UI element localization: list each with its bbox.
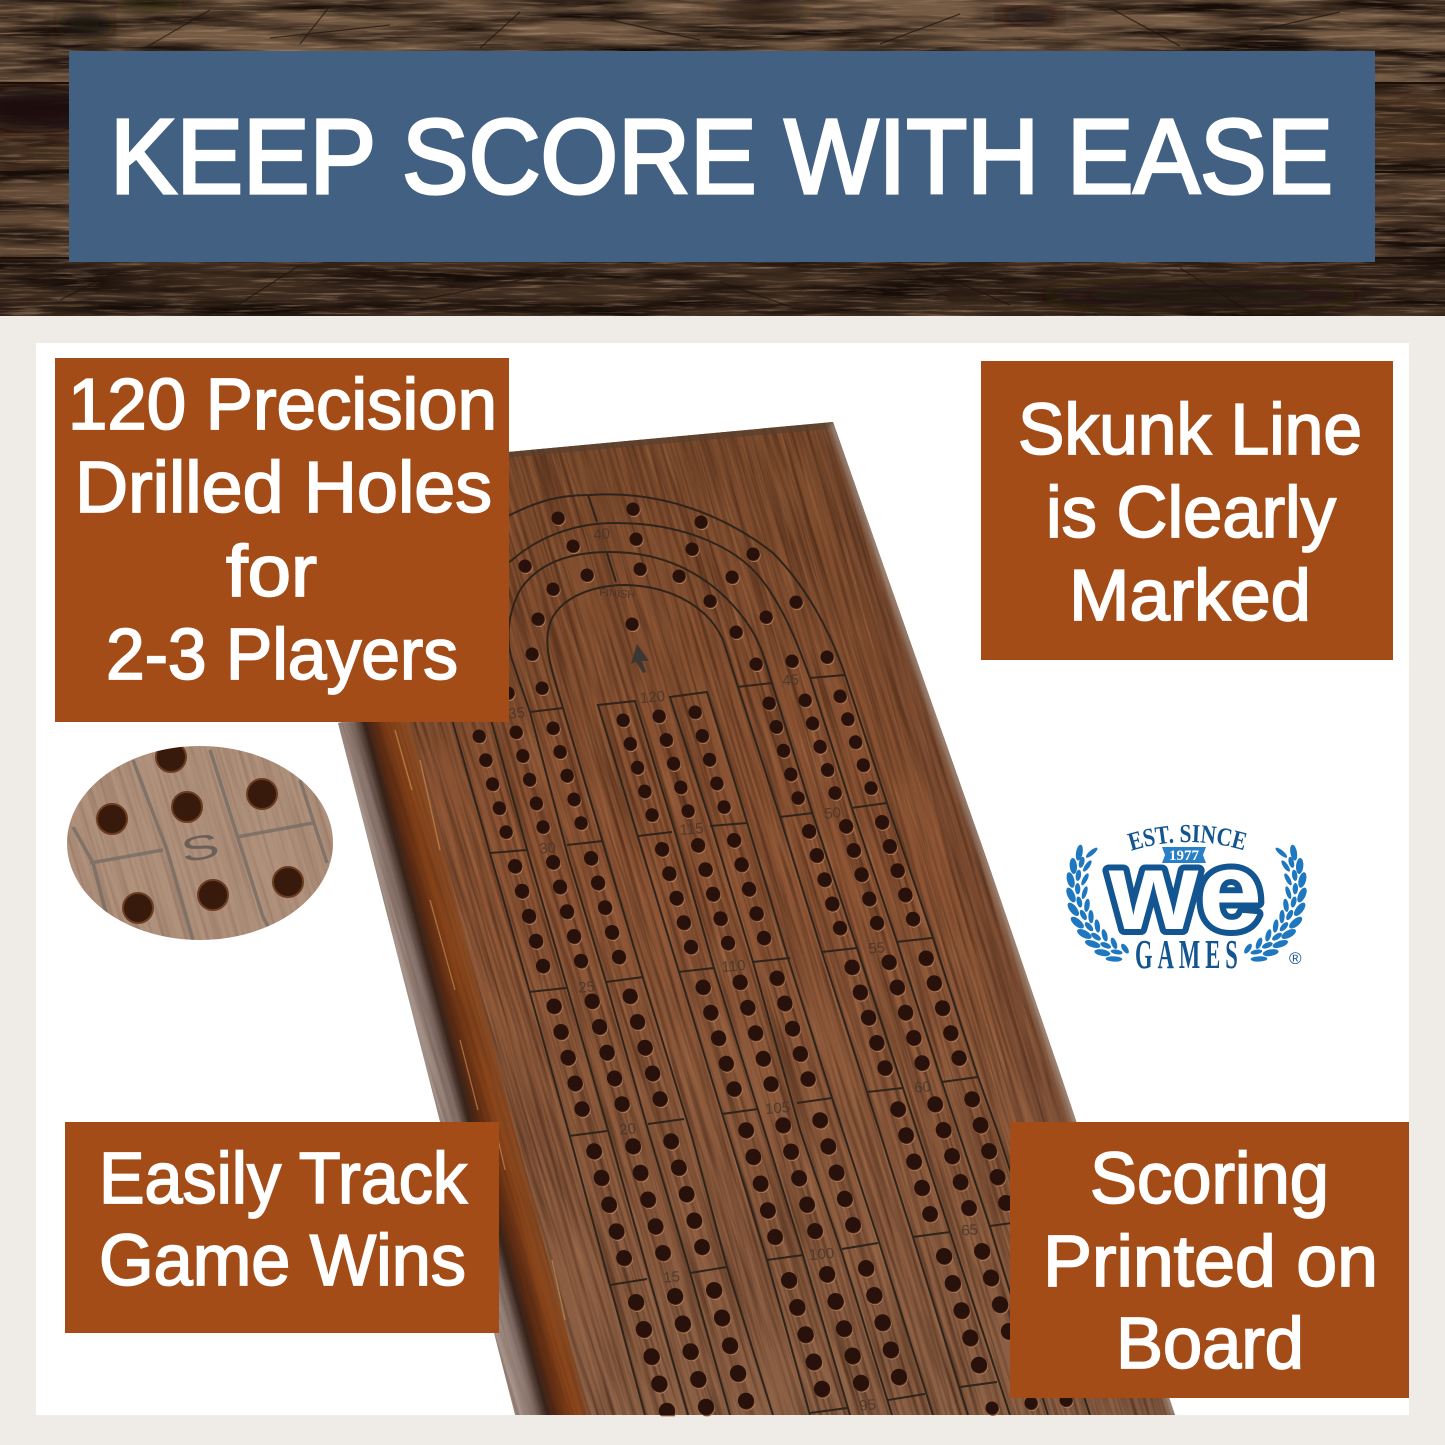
- peg hole light rim: [480, 510, 1067, 1412]
- callout text: Game Wins: [99, 1221, 466, 1301]
- board score numbers: 95: [859, 1396, 877, 1415]
- board score numbers: 35: [508, 704, 526, 723]
- laurel right: [1243, 844, 1309, 962]
- callout text: Printed on: [1043, 1222, 1378, 1302]
- callout: scoring printed: [1010, 1122, 1409, 1398]
- title banner: [69, 51, 1375, 262]
- board score numbers: 105: [764, 1099, 791, 1118]
- board score numbers: 45: [782, 671, 800, 690]
- wood plank header band: [0, 0, 1445, 316]
- board score numbers: 65: [961, 1221, 979, 1240]
- 1977: 1977: [1169, 848, 1200, 864]
- registered mark: ®: [1289, 949, 1302, 968]
- board score numbers: 40: [593, 525, 611, 544]
- EST. SINCE: EST. SINCE: [1126, 824, 1246, 851]
- peg holes: [479, 509, 1066, 1411]
- EST. SINCE arc guide: [1131, 842, 1246, 851]
- 1977 ribbon: [1162, 847, 1206, 863]
- callout text: Easily Track: [99, 1139, 468, 1219]
- callout text: Board: [1116, 1304, 1304, 1384]
- board side edge: [338, 700, 600, 1415]
- callout text: [99, 1139, 468, 1301]
- board score numbers: 50: [824, 804, 842, 823]
- board score numbers: 25: [578, 978, 596, 997]
- oval wood grain, lines and holes: [67, 742, 333, 945]
- oval wood grain, lines and holes: S: [178, 826, 222, 870]
- callout text: Scoring: [1090, 1139, 1329, 1219]
- title text: KEEP SCORE WITH EASE: [110, 98, 1333, 216]
- skunk line close-up oval: [67, 742, 333, 945]
- callout text: Marked: [1069, 556, 1311, 636]
- board score numbers: 115: [679, 820, 704, 839]
- callout text: is Clearly: [1046, 473, 1336, 553]
- board face: [410, 422, 1175, 1415]
- callout text: Drilled Holes: [75, 448, 492, 528]
- callout text: [1043, 1139, 1378, 1384]
- board score numbers: [508, 525, 979, 1415]
- wood grain light: [410, 422, 1175, 1415]
- wood grain dark: [410, 422, 1175, 1415]
- board score numbers: 120: [639, 688, 666, 707]
- callout text: [1018, 390, 1362, 636]
- board score numbers: FINISH: [599, 586, 636, 602]
- callout text: [68, 365, 497, 695]
- edge bevels: [395, 422, 1175, 1415]
- track lines: [428, 494, 1090, 1415]
- callout text: 120 Precision: [68, 365, 497, 445]
- callout: track game wins: [65, 1122, 499, 1333]
- white content panel: [36, 343, 1409, 1415]
- board score numbers: 20: [619, 1120, 637, 1139]
- we wordmark: we: [1108, 830, 1262, 953]
- board score numbers: 15: [663, 1268, 681, 1287]
- board score numbers: 110: [721, 957, 746, 976]
- board score numbers: 100: [808, 1245, 835, 1264]
- callout text: Skunk Line: [1018, 390, 1362, 470]
- GAMES: GAMES: [1135, 933, 1238, 978]
- board score numbers: 55: [868, 939, 886, 958]
- callout text: for: [226, 532, 317, 612]
- board score numbers: 30: [539, 839, 557, 858]
- laurel left: [1064, 844, 1130, 962]
- cribbage board photo: [338, 422, 1175, 1415]
- finish arrow: [631, 644, 649, 673]
- peg hole warm inner wall: [480, 510, 1066, 1412]
- callout text: 2-3 Players: [106, 615, 458, 695]
- callout: skunk line: [981, 361, 1393, 660]
- callout: 120 precision holes: [55, 358, 509, 722]
- board score numbers: 60: [914, 1078, 932, 1097]
- side grain: [338, 722, 588, 1415]
- WE Games logo: [1066, 824, 1307, 978]
